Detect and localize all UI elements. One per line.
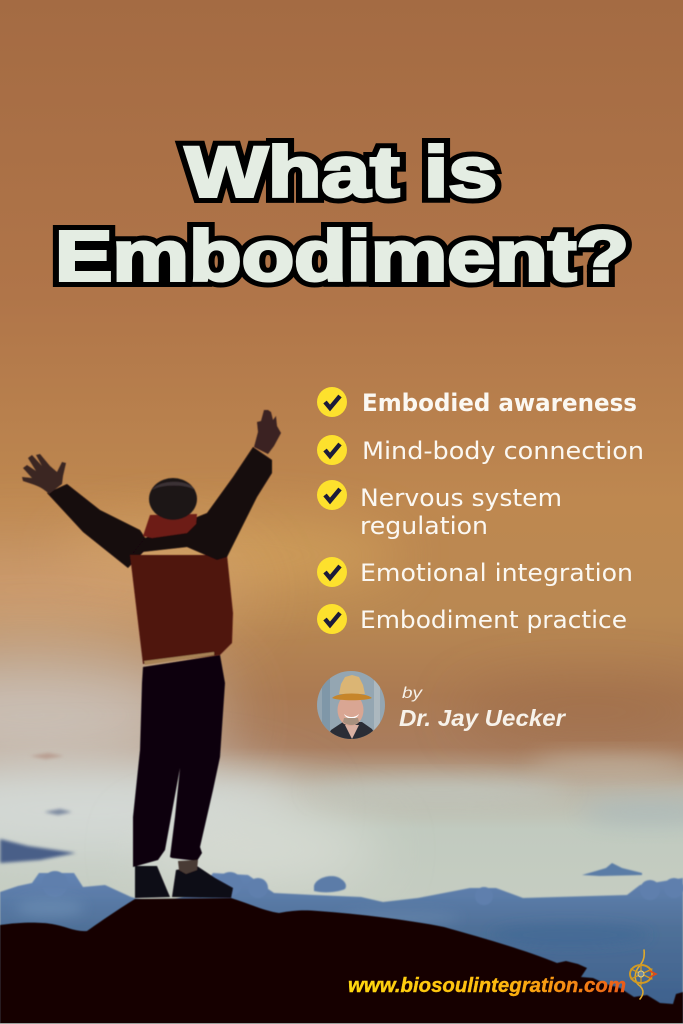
- jacket hem: [144, 652, 214, 665]
- icon: biosoul logo: [630, 950, 656, 999]
- item: embodied awareness: Embodied awareness: [362, 389, 637, 417]
- left raised arm sleeve: [47, 484, 150, 568]
- item: embodiment practice: Embodiment practice: [360, 606, 627, 634]
- author byline: [399, 685, 566, 731]
- hill and trees silhouette: [0, 898, 683, 1024]
- item: nervous system regulation: regulation: [360, 512, 488, 540]
- right open hand: [254, 410, 281, 454]
- item: nervous system regulation: [317, 480, 562, 540]
- item: mind-body connection: Mind-body connection: [362, 437, 644, 465]
- hood collar: [143, 514, 197, 538]
- person silhouette with raised arms: [22, 410, 281, 898]
- jacket: [130, 555, 233, 664]
- title: What is: [185, 134, 497, 212]
- legs: [133, 655, 225, 867]
- left open hand: [22, 454, 66, 494]
- jacket shoulders: [133, 447, 272, 560]
- title: Embodiment?: [55, 218, 629, 296]
- sock: [178, 860, 198, 874]
- author byline: Dr. Jay Uecker: [399, 705, 566, 731]
- cloud mottling: [16, 899, 650, 947]
- author portrait: [317, 671, 385, 739]
- left boot: [135, 866, 170, 898]
- item: emotional integration: Emotional integration: [360, 559, 633, 587]
- item: nervous system regulation: Nervous system: [360, 484, 562, 512]
- author byline: by: [402, 685, 423, 702]
- right boot: [172, 866, 233, 898]
- bottom edge strip: [0, 1023, 683, 1024]
- website url: www.biosoulintegration.com: [348, 975, 626, 997]
- checklist: [317, 387, 644, 634]
- head: [149, 478, 197, 520]
- title: Embodiment?: [55, 218, 629, 296]
- dark wisp clouds: [0, 753, 76, 863]
- title: [55, 134, 629, 296]
- beanie highlight: [152, 482, 195, 490]
- distant clouds: [0, 863, 683, 1024]
- title: What is: [185, 134, 497, 212]
